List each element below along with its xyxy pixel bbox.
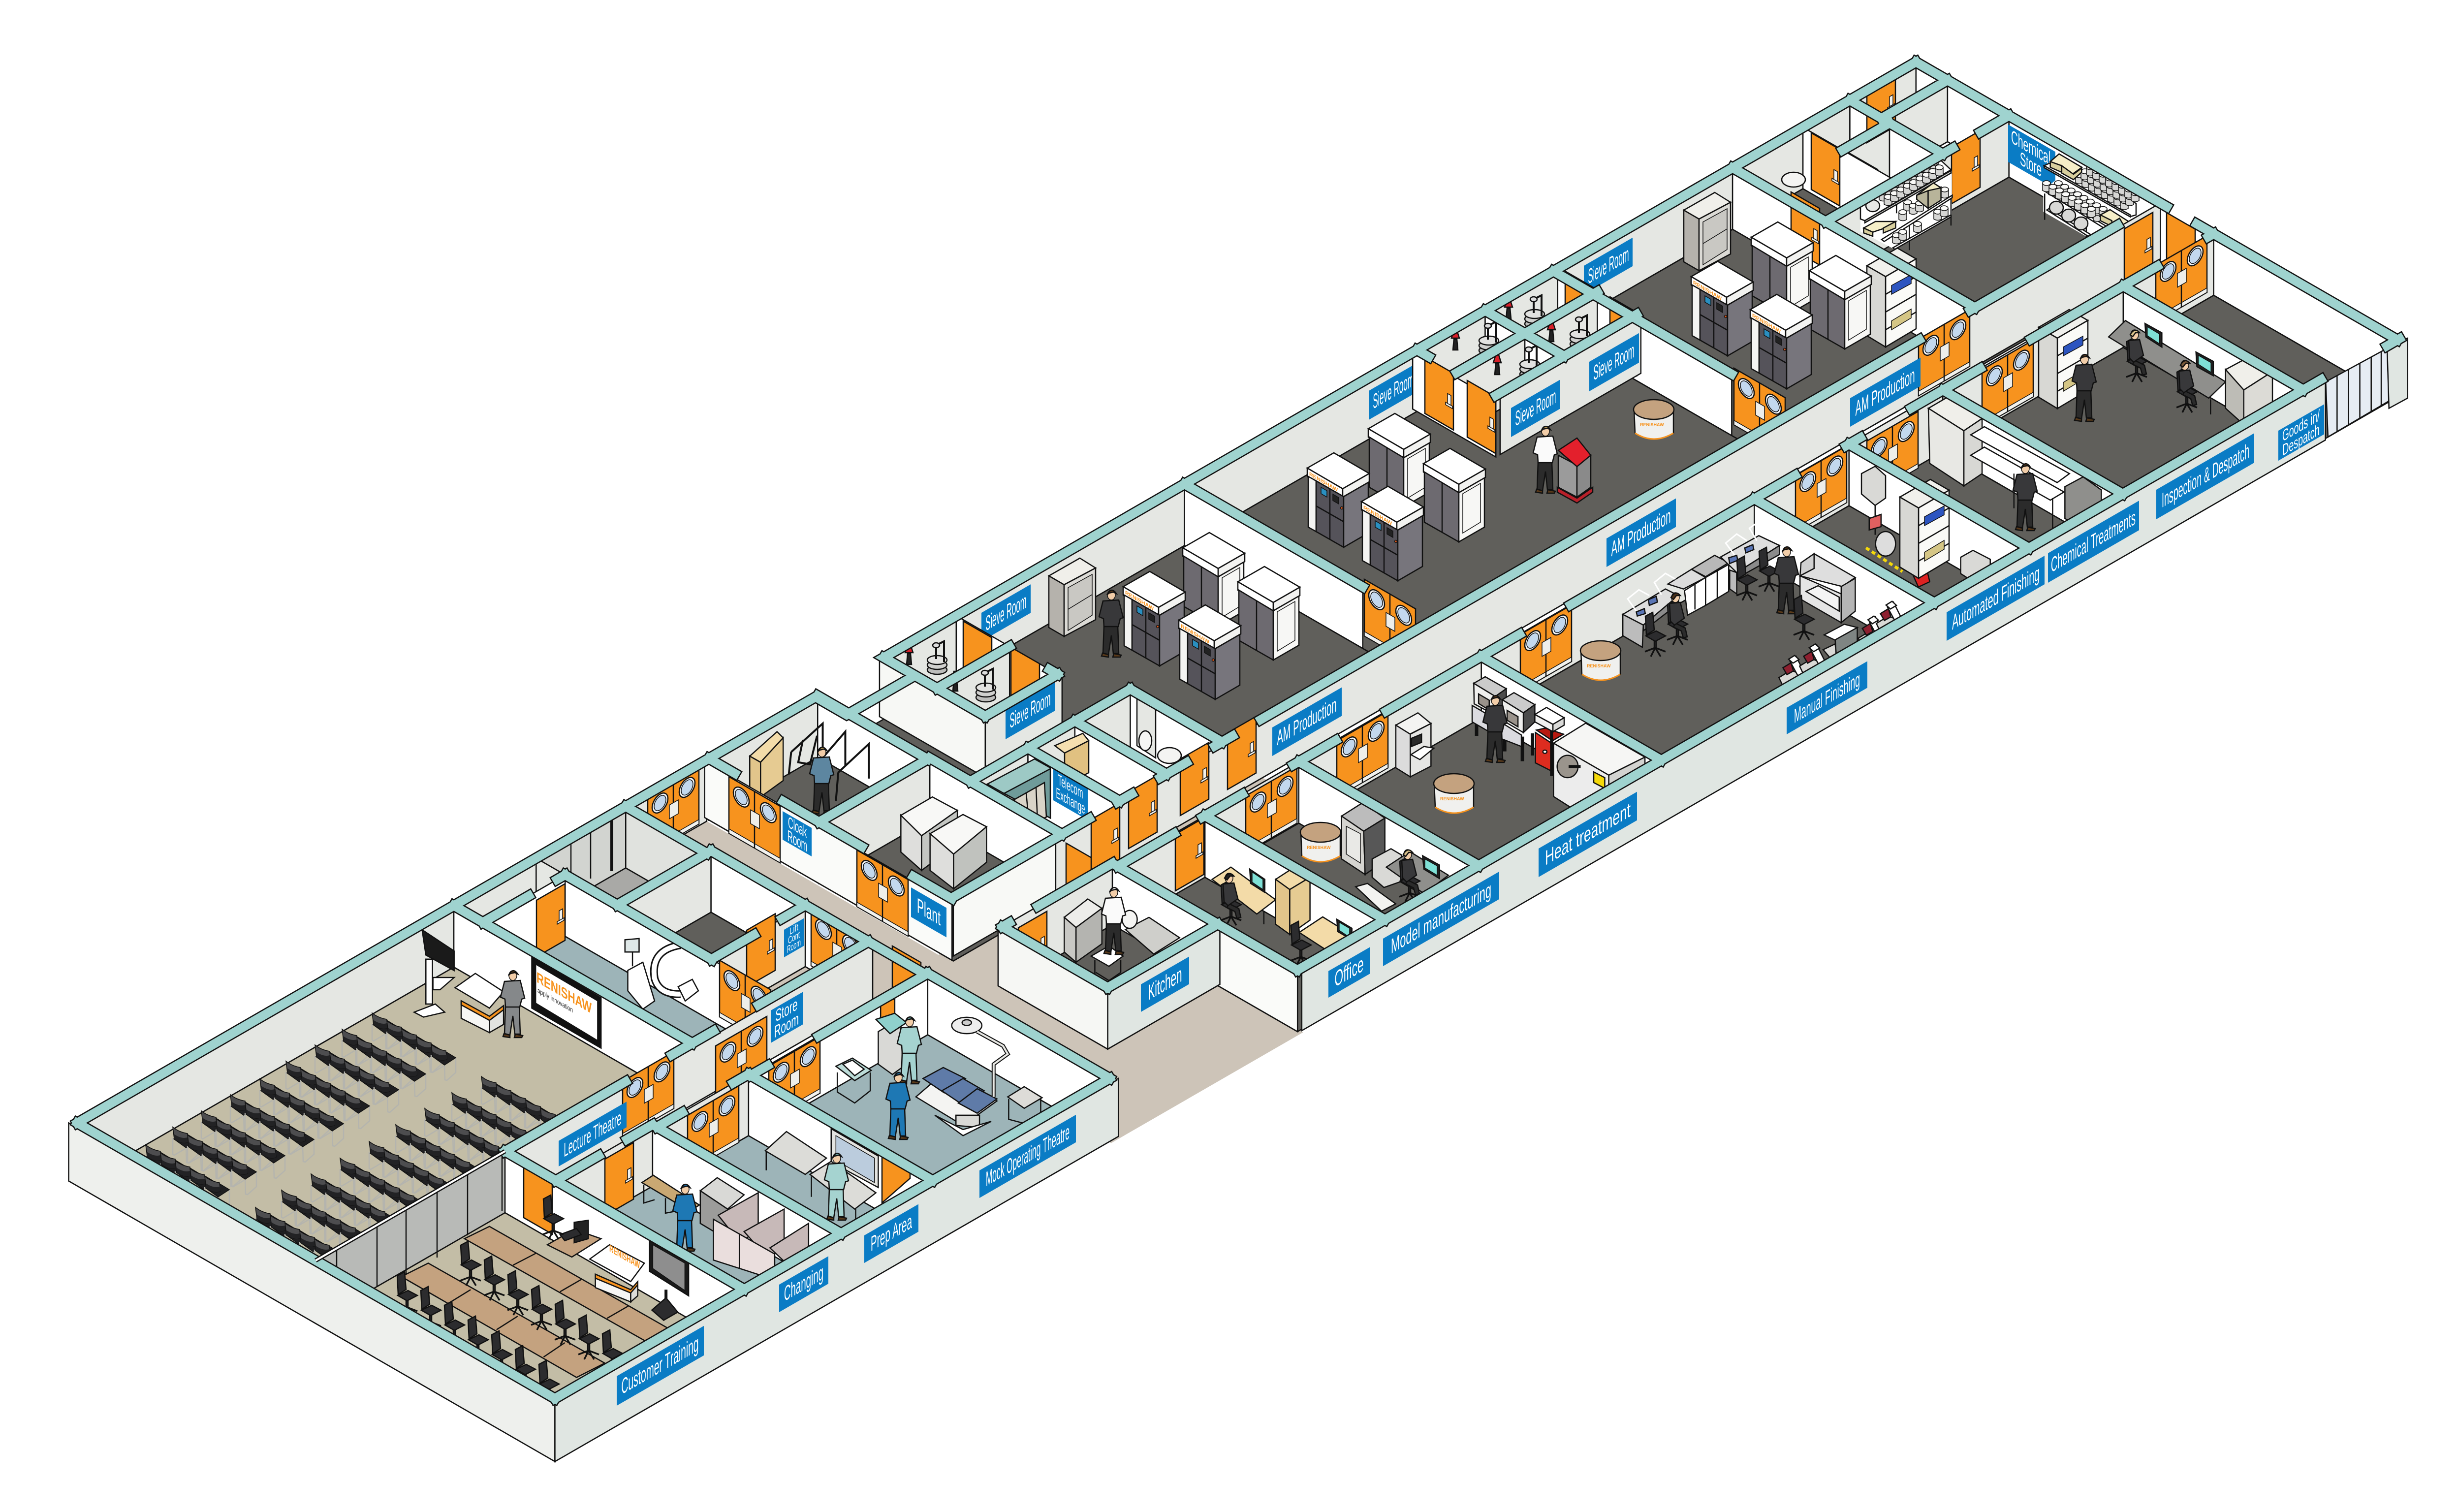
wall face: cloak and plant corridor side <box>656 761 1001 960</box>
shelving unit <box>2039 310 2088 409</box>
door: AM1 double door <box>1364 579 1416 665</box>
person at cloak rack <box>810 747 834 814</box>
label: lift control room: Lift <box>789 921 798 937</box>
room: closet with lift curtain <box>483 806 760 967</box>
label: chemical treatments <box>2048 501 2139 583</box>
operator with red powder hopper <box>1533 426 1593 503</box>
AM machines <box>1123 533 1300 699</box>
room: mock operating theatre <box>697 974 1163 1242</box>
wardrobe <box>750 732 783 797</box>
wall strip: lecture front wall: Lecture Theatre <box>564 1106 621 1162</box>
lecture chairs right block <box>255 1076 565 1275</box>
text: Automated Finishing <box>1952 561 2040 634</box>
seated staff <box>2126 330 2197 412</box>
label: goods in and despatch <box>2278 404 2324 462</box>
staff seated and standing <box>1645 547 1814 657</box>
room: dark floor store <box>564 850 858 1021</box>
room: cloak room <box>656 696 981 883</box>
projection screen <box>532 957 601 1048</box>
shelving with powder jars <box>1860 154 2139 250</box>
label: heat treatment <box>1539 792 1637 877</box>
training chairs <box>397 1195 623 1405</box>
goods in shutter <box>2326 338 2408 437</box>
training desk, lectern, monitor, tables <box>402 1220 689 1378</box>
kitchen fridge, sink and trolley <box>1064 899 1180 980</box>
label: AM production 1 <box>1272 688 1342 756</box>
folding partition panel lines <box>337 1152 502 1304</box>
room: prep area <box>603 1074 986 1295</box>
label: manual finishing <box>1787 661 1867 734</box>
label: AM production 2 <box>1606 499 1676 567</box>
bench, lockers, cubicles <box>642 1175 809 1280</box>
label: model manufacturing: Model manufacturing <box>1391 877 1491 958</box>
presenter <box>501 971 525 1038</box>
wall strip: lecture front wall <box>460 944 922 1210</box>
plant cabinets <box>901 797 986 889</box>
label: AM production 3 <box>1850 357 1921 427</box>
label: cloak room <box>783 810 812 858</box>
label: sieve room <box>1584 238 1633 294</box>
lectern <box>455 974 504 1033</box>
label: sieve room back wall <box>1369 362 1418 420</box>
label: kitchen: Kitchen <box>1148 962 1182 1006</box>
label: office: Office <box>1335 951 1364 992</box>
operator <box>1099 590 1123 657</box>
wall strip: AM corridor back wall <box>904 203 2209 956</box>
room: store <box>975 721 1222 864</box>
room: goods in and despatch <box>2070 234 2447 451</box>
cabinet <box>2226 357 2272 425</box>
label: store room <box>771 991 803 1043</box>
technician <box>1483 695 1507 762</box>
fume cupboard and benches <box>1928 397 2101 531</box>
standing inspector <box>2072 354 2096 421</box>
room: automated finishing <box>1701 444 2082 664</box>
C-arm x-ray machine <box>625 939 698 1009</box>
label: sieve room face 2 <box>1589 333 1639 391</box>
door: prep area side <box>882 1156 910 1203</box>
door: AM2 double door <box>1734 368 1785 454</box>
room: lecture theatre <box>24 906 746 1322</box>
room: heat treatment <box>1245 657 1715 927</box>
desks, wardrobe and monitors <box>1212 867 1352 951</box>
room: inspection and despatch <box>1890 286 2357 555</box>
finishing benches, cabinets, booth and grinders <box>1623 520 1902 686</box>
label: chemical store <box>2008 124 2055 189</box>
desks with monitors <box>2109 320 2226 414</box>
AM machines <box>1307 413 1485 581</box>
room: customer training: RENISHAW <box>609 1242 640 1271</box>
locker <box>1684 192 1731 271</box>
room: AM Production 3: Sieve Room <box>1588 242 1629 288</box>
label: lift control room <box>784 917 804 957</box>
seated staff <box>1221 873 1241 925</box>
label: telecom exchange <box>1053 768 1088 820</box>
3D printer and desk <box>1342 803 1449 911</box>
sieve rooms cluster upper <box>1364 269 1690 457</box>
label: mock operating theatre <box>979 1115 1076 1198</box>
label: goods in and despatch: Despatch <box>2282 421 2319 460</box>
label: sieve room AM1 back wall <box>981 584 1031 641</box>
projection screen: apply innovation <box>537 986 573 1014</box>
label: lift control room: Cont <box>788 928 800 946</box>
label: automated finishing <box>1947 556 2045 641</box>
technician <box>2013 464 2037 531</box>
staff <box>886 1017 921 1139</box>
corridor floor and end wall <box>577 608 1504 1143</box>
label: plant: Plant <box>917 893 941 930</box>
room: AM Production 2 <box>1131 269 1847 684</box>
label: lecture theatre <box>559 1102 627 1166</box>
text: Mock Operating Theatre <box>986 1119 1070 1191</box>
room: plant <box>766 758 1117 961</box>
room: telecom exchange: Exchange <box>1056 784 1085 818</box>
room: X-ray C-arm room <box>430 875 828 1104</box>
text: Chemical Treatments <box>2051 505 2136 577</box>
room: lift control lobby <box>658 905 922 1057</box>
room: AM Production 1: Sieve Room <box>985 589 1026 635</box>
label: changing <box>779 1256 828 1312</box>
label: plant <box>911 887 946 938</box>
staff in gown <box>824 1153 849 1220</box>
label: chemical store: Chemical <box>2011 126 2050 169</box>
room: model manufacturing <box>1152 762 1532 981</box>
operating table, lamp and trolleys <box>836 999 1042 1135</box>
podium AM2 <box>1634 400 1674 439</box>
label: heat treatment: Heat treatment <box>1545 797 1631 870</box>
label: store room: Room <box>774 1009 799 1041</box>
label: sieve room face 1 <box>1511 379 1560 437</box>
AM machines <box>1691 222 1871 389</box>
room: telecom exchange <box>917 748 1175 897</box>
sieve rooms cluster upper: Sieve Room <box>1515 384 1556 431</box>
sieve rooms cluster lower: Sieve Room <box>1009 686 1050 733</box>
door: chemical store <box>1952 131 1980 204</box>
sieve rooms cluster upper: Sieve Room <box>1593 338 1634 385</box>
label: lift control room: Room <box>787 936 801 955</box>
empty office chair <box>1291 921 1311 966</box>
label: office <box>1328 947 1370 998</box>
room: small closet <box>401 858 619 984</box>
prep tables and window <box>765 1129 878 1221</box>
room: AM Production 3 <box>1500 168 2028 472</box>
shelving unit <box>1867 248 1916 347</box>
label: sieve room lower <box>1006 682 1055 739</box>
room: office <box>1064 816 1438 1032</box>
coat racks <box>789 724 869 801</box>
label: prep area: Prep Area <box>871 1209 912 1256</box>
automated finishing equipment <box>1861 466 1990 587</box>
wall strip: AM corridor back wall: AM Production <box>1277 693 1337 750</box>
label: changing: Changing <box>784 1260 823 1306</box>
room: manual finishing <box>1428 499 1987 822</box>
label: model manufacturing <box>1383 872 1499 966</box>
text: Inspection & Despatch <box>2162 439 2249 512</box>
lecture chairs left block <box>146 1013 456 1212</box>
monitor on stand <box>414 930 454 1017</box>
label: kitchen <box>1141 956 1189 1012</box>
control cart, furnaces, oven, hot isostatic press <box>1396 677 1645 808</box>
label: prep area <box>864 1204 918 1263</box>
projection screen: RENISHAW <box>536 969 592 1017</box>
door: AM3 side <box>1791 192 1820 265</box>
text: Manual Finishing <box>1794 668 1860 728</box>
sieve rooms cluster lower <box>830 616 1111 778</box>
room: chemical store <box>1772 116 2211 369</box>
door: corridor end double door <box>648 767 699 853</box>
staff in scrubs <box>673 1184 697 1251</box>
wall strip: AM corridor back wall: AM Production <box>1856 363 1915 420</box>
label: store room: Store <box>776 994 798 1026</box>
room: changing <box>503 1125 894 1351</box>
label: customer training <box>617 1326 704 1406</box>
room: small utility rooms top <box>1679 62 2062 283</box>
label: chemical store: Store <box>2020 148 2042 181</box>
label: inspection and despatch <box>2156 433 2254 519</box>
label: cloak room: Cloak <box>788 814 807 842</box>
locker <box>1049 558 1096 636</box>
label: cloak room: Room <box>788 827 807 855</box>
label: telecom exchange: Telecom <box>1058 771 1083 802</box>
room: toilet <box>1022 689 1277 837</box>
room: kitchen <box>949 863 1271 1049</box>
room: chemical treatments <box>1796 390 2176 609</box>
telecom panel and cabinet <box>987 759 1050 823</box>
room: AM Production 2: Sieve Room <box>1373 367 1414 413</box>
label: goods in and despatch: Goods in/ <box>2282 407 2320 445</box>
wall strip: AM corridor back wall: AM Production <box>1611 504 1671 561</box>
room: AM Production 1 <box>822 484 1478 862</box>
room: customer training <box>262 1151 798 1460</box>
text: Customer Training <box>622 1331 699 1400</box>
